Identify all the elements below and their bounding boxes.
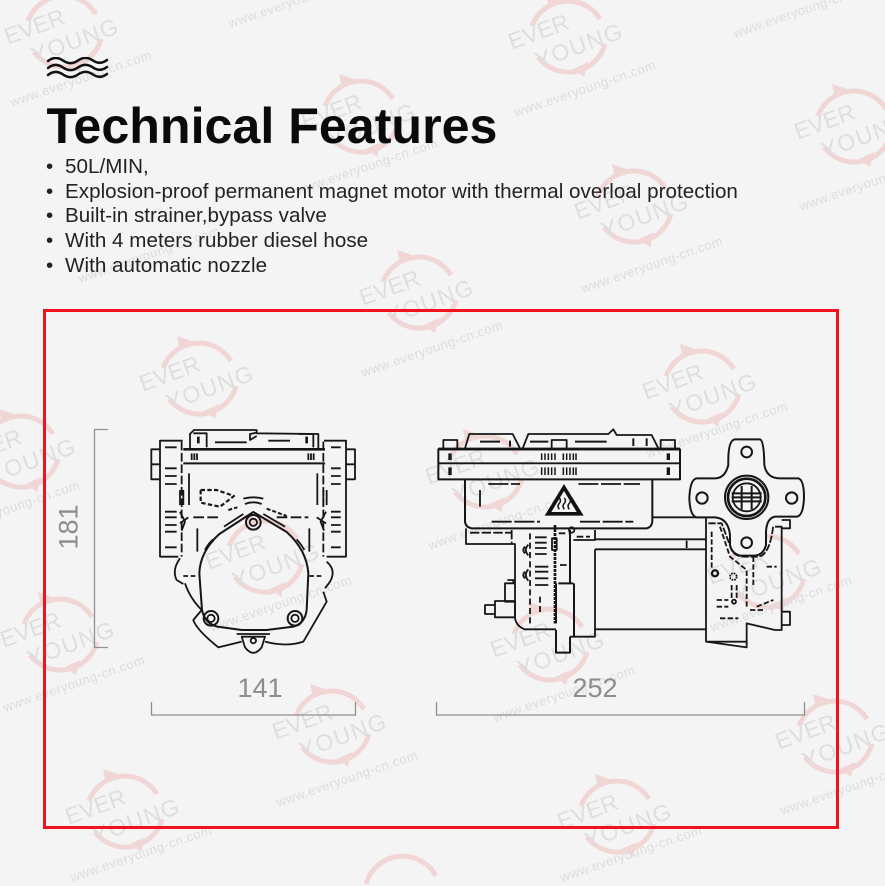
icon: waves <box>46 57 108 78</box>
watermark layer: YOUNG <box>666 368 761 423</box>
watermark layer: YOUNG <box>598 188 693 243</box>
watermark layer: YOUNG <box>581 798 676 853</box>
watermark layer: EVER <box>136 351 203 396</box>
watermark layer: www.everyoung-cn.com <box>511 57 658 120</box>
watermark layer: EVER <box>422 444 489 489</box>
watermark layer: YOUNG <box>89 793 184 848</box>
dimension: width 141 <box>152 673 356 715</box>
pump side view <box>438 429 804 653</box>
watermark layer: www.everyoung-cn.com <box>490 662 637 725</box>
watermark layer: YOUNG <box>28 13 123 68</box>
watermark layer: www.everyoung-cn.com <box>358 317 505 380</box>
watermark layer: www.everyoung-cn.com <box>0 652 147 715</box>
watermark layer: www.everyoung-cn.com <box>75 223 222 286</box>
watermark layer: www.everyoung-cn.com <box>707 572 854 635</box>
watermark layer: EVER <box>505 9 572 54</box>
dimension: width 252: 252 <box>572 673 618 703</box>
watermark layer: www.everyoung-cn.com <box>557 822 704 885</box>
watermark layer: EVER <box>554 789 621 834</box>
title: Technical Features <box>46 98 497 154</box>
dimension: width 252 <box>436 673 804 715</box>
pump front view <box>151 430 355 653</box>
feature list: With automatic nozzle <box>65 254 267 277</box>
feature list: • <box>46 254 53 277</box>
watermark layer: EVER <box>62 784 129 829</box>
watermark layer: YOUNG <box>296 708 391 763</box>
watermark layer: YOUNG <box>229 538 324 593</box>
panel: red frame <box>43 309 839 829</box>
watermark layer: EVER <box>1 4 68 49</box>
dimension: height 181 <box>54 430 108 648</box>
watermark layer: EVER <box>298 89 365 134</box>
watermark layer: www.everyoung-cn.com <box>293 135 440 198</box>
feature list: 50L/MIN, <box>65 155 149 178</box>
watermark layer: EVER <box>704 544 771 589</box>
watermark layer: YOUNG <box>325 98 420 153</box>
watermark layer: EVER <box>791 99 858 144</box>
watermark layer: EVER <box>356 265 423 310</box>
watermark layer: EVER <box>571 179 638 224</box>
dimension: width 141: 141 <box>237 673 283 703</box>
feature list: Explosion-proof permanent magnet motor with thermal overloal protection <box>65 180 738 203</box>
watermark layer: YOUNG <box>532 18 627 73</box>
watermark layer: EVER <box>269 699 336 744</box>
watermark layer: www.everyoung-cn.com <box>578 233 725 296</box>
watermark layer: EVER <box>772 709 839 754</box>
watermark layer: YOUNG <box>383 274 478 329</box>
feature list <box>46 155 738 277</box>
watermark layer: www.everyoung-cn.com <box>273 747 420 810</box>
watermark layer: YOUNG <box>731 553 826 608</box>
watermark layer: YOUNG <box>514 626 609 681</box>
watermark layer: www.everyoung-cn.com <box>643 398 790 461</box>
watermark layer: www.everyoung-cn.com <box>7 47 154 110</box>
watermark layer: www.everyoung-cn.com <box>207 572 354 635</box>
feature list: With 4 meters rubber diesel hose <box>65 229 368 252</box>
watermark layer: EVER <box>487 617 554 662</box>
feature list: • <box>46 155 53 178</box>
watermark layer: YOUNG <box>449 453 544 508</box>
dimension: height 181: 181 <box>54 504 84 550</box>
feature list: Built-in strainer,bypass valve <box>65 204 327 227</box>
feature list: • <box>46 204 53 227</box>
watermark layer: YOUNG <box>24 616 119 671</box>
watermark layer: EVER <box>202 529 269 574</box>
watermark layer: EVER <box>639 359 706 404</box>
watermark layer: www.everyoung-cn.com <box>425 490 572 553</box>
feature list: • <box>46 180 53 203</box>
feature list: • <box>46 229 53 252</box>
watermark layer: www.everyoung-cn.com <box>67 822 214 885</box>
watermark layer: YOUNG <box>163 360 258 415</box>
